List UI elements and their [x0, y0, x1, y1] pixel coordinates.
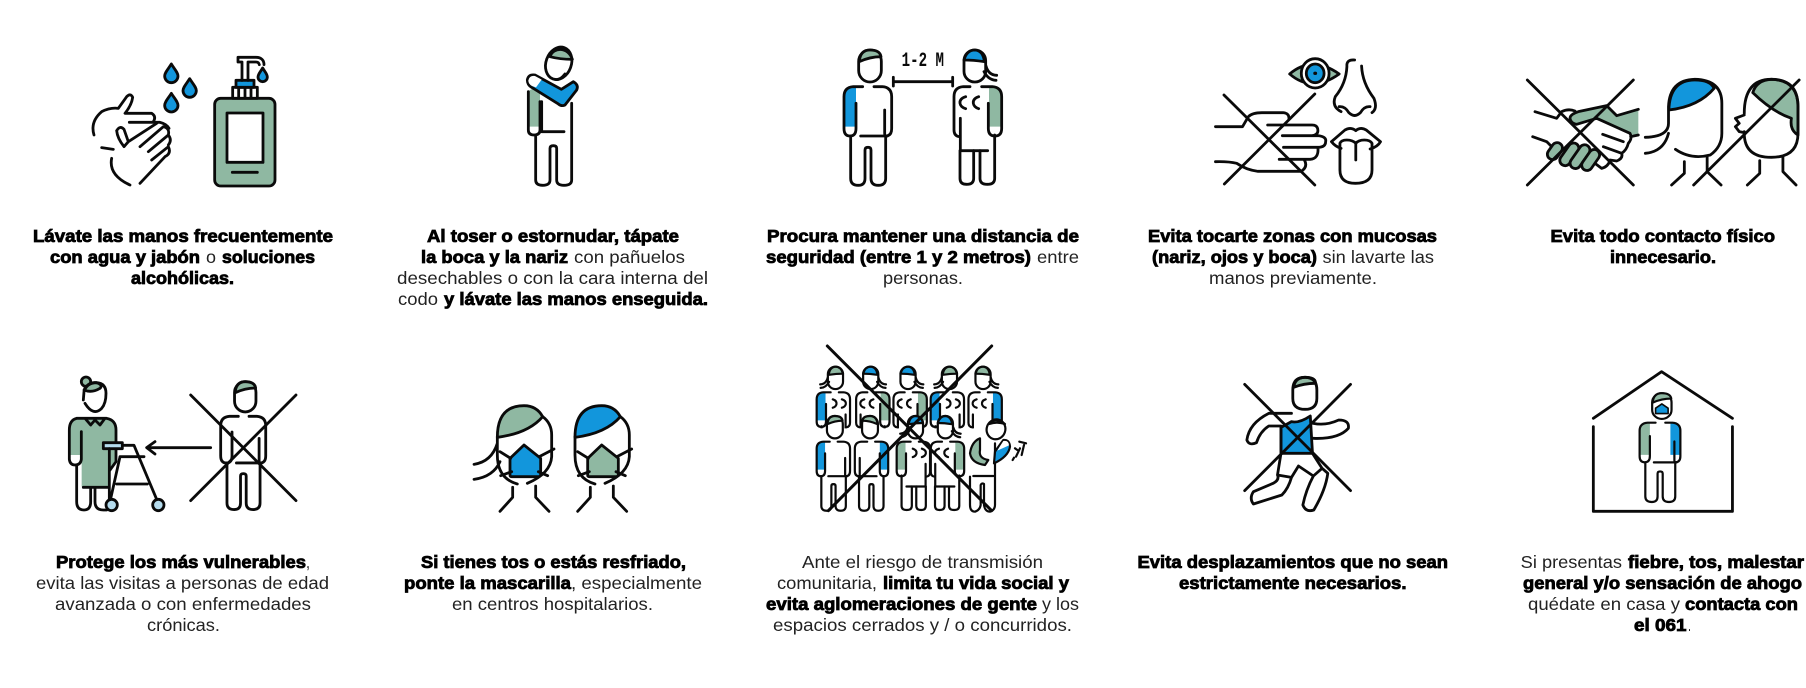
- icon: two people 1-2 metres apart: [844, 50, 1002, 185]
- caption: keep distance: Procura mantener una distancia de: [767, 226, 1079, 246]
- caption: wear mask: Si tienes tos o estás resfriado,: [421, 552, 686, 572]
- caption: avoid travel: [1138, 552, 1448, 593]
- caption: cover cough: [397, 226, 708, 309]
- caption: cover cough: y lávate las manos enseguida.: [444, 289, 708, 309]
- caption: protect vulnerable: ,: [306, 552, 310, 572]
- panel: avoid crowds: [766, 346, 1079, 635]
- caption: avoid physical contact: [1550, 226, 1775, 267]
- caption: stay home: el 061: [1634, 615, 1687, 635]
- caption: wear mask: ponte la mascarilla: [404, 573, 571, 593]
- caption: do not touch face: Evita tocarte zonas con mucosas: [1148, 226, 1437, 246]
- caption: avoid crowds: Ante el riesgo de transmisión: [802, 552, 1043, 572]
- panel: do not touch face: [1148, 59, 1437, 288]
- caption: protect vulnerable: crónicas.: [147, 615, 220, 635]
- caption: wash hands: con agua y jabón: [50, 247, 200, 267]
- caption: do not touch face: (nariz, ojos y boca): [1152, 247, 1317, 267]
- caption: protect vulnerable: evita las visitas a personas de edad: [36, 573, 329, 593]
- icon: handshake: [1527, 80, 1638, 185]
- caption: stay home: Si presentas: [1521, 552, 1622, 572]
- caption: protect vulnerable: avanzada o con enfermedades: [55, 594, 311, 614]
- caption: avoid crowds: espacios cerrados y / o concurridos.: [773, 615, 1072, 635]
- icon: elderly woman with walker: [69, 377, 164, 511]
- caption: do not touch face: [1148, 226, 1437, 288]
- caption: cover cough: Al toser o estornudar, tápate: [427, 226, 679, 246]
- caption: avoid travel: Evita desplazamientos que no sean: [1138, 552, 1448, 572]
- icon: person coughing into elbow: [527, 43, 577, 185]
- icon: crossed hands with eye nose mouth: [1215, 59, 1381, 185]
- caption: keep distance: entre: [1037, 247, 1079, 267]
- caption: stay home: fiebre, tos, malestar: [1628, 552, 1804, 572]
- caption: avoid crowds: limita tu vida social y: [883, 573, 1069, 593]
- icon: soap dispenser and hands: [93, 57, 275, 186]
- panel: avoid physical contact: [1527, 79, 1799, 267]
- panel: stay home: [1521, 372, 1804, 635]
- icon: crossed crowd of people: [817, 346, 1026, 512]
- caption: wear mask: , especialmente: [571, 573, 702, 593]
- caption: cover cough: desechables o con la cara interna del: [397, 268, 708, 288]
- caption: stay home: [1521, 552, 1804, 635]
- caption: wash hands: o: [206, 247, 216, 267]
- caption: stay home: quédate en casa y: [1528, 594, 1680, 614]
- caption: avoid travel: estrictamente necesarios.: [1179, 573, 1406, 593]
- caption: stay home: .: [1688, 615, 1691, 635]
- panel: keep distance: [766, 50, 1079, 288]
- caption: avoid physical contact: innecesario.: [1610, 247, 1716, 267]
- panel: protect vulnerable: [36, 377, 329, 635]
- caption: wash hands: Lávate las manos frecuentemente: [33, 226, 333, 246]
- icon: two people 1-2 metres apart: 1-2 M: [902, 50, 944, 73]
- icon: two faces: [1645, 79, 1799, 185]
- icon: elderly woman with walker and crossed visitor: [69, 377, 296, 511]
- caption: wear mask: en centros hospitalarios.: [452, 594, 653, 614]
- caption: keep distance: [766, 226, 1079, 288]
- panel: wash hands: [33, 57, 333, 288]
- caption: do not touch face: manos previamente.: [1209, 268, 1377, 288]
- caption: avoid crowds: evita aglomeraciones de gente: [766, 594, 1037, 614]
- caption: wash hands: soluciones: [222, 247, 315, 267]
- caption: keep distance: personas.: [883, 268, 963, 288]
- caption: keep distance: seguridad (entre 1 y 2 metros): [766, 247, 1031, 267]
- icon: two faces with masks: [474, 406, 632, 511]
- caption: wash hands: [33, 226, 333, 288]
- panel: cover cough: [397, 43, 708, 309]
- caption: do not touch face: sin lavarte las: [1322, 247, 1434, 267]
- caption: cover cough: con pañuelos: [574, 247, 685, 267]
- icon: crossed running person: [1245, 377, 1351, 511]
- caption: protect vulnerable: Protege los más vulnerables: [56, 552, 306, 572]
- caption: avoid crowds: [766, 552, 1079, 635]
- caption: wash hands: alcohólicas.: [131, 268, 234, 288]
- caption: cover cough: codo: [398, 289, 438, 309]
- icon: crossed handshake and faces: [1527, 79, 1799, 185]
- caption: protect vulnerable: [36, 552, 329, 635]
- caption: avoid crowds: y los: [1042, 594, 1079, 614]
- panel: wear mask: [404, 406, 702, 614]
- caption: avoid physical contact: Evita todo contacto físico: [1550, 226, 1775, 246]
- caption: stay home: general y/o sensación de ahogo: [1523, 573, 1802, 593]
- icon: house with masked person: [1593, 372, 1732, 511]
- caption: avoid crowds: comunitaria,: [777, 573, 877, 593]
- panel: avoid travel: [1138, 377, 1448, 593]
- caption: wear mask: [404, 552, 702, 614]
- icon: sneezing figure: [970, 417, 1026, 512]
- caption: stay home: contacta con: [1685, 594, 1798, 614]
- caption: cover cough: la boca y la nariz: [421, 247, 568, 267]
